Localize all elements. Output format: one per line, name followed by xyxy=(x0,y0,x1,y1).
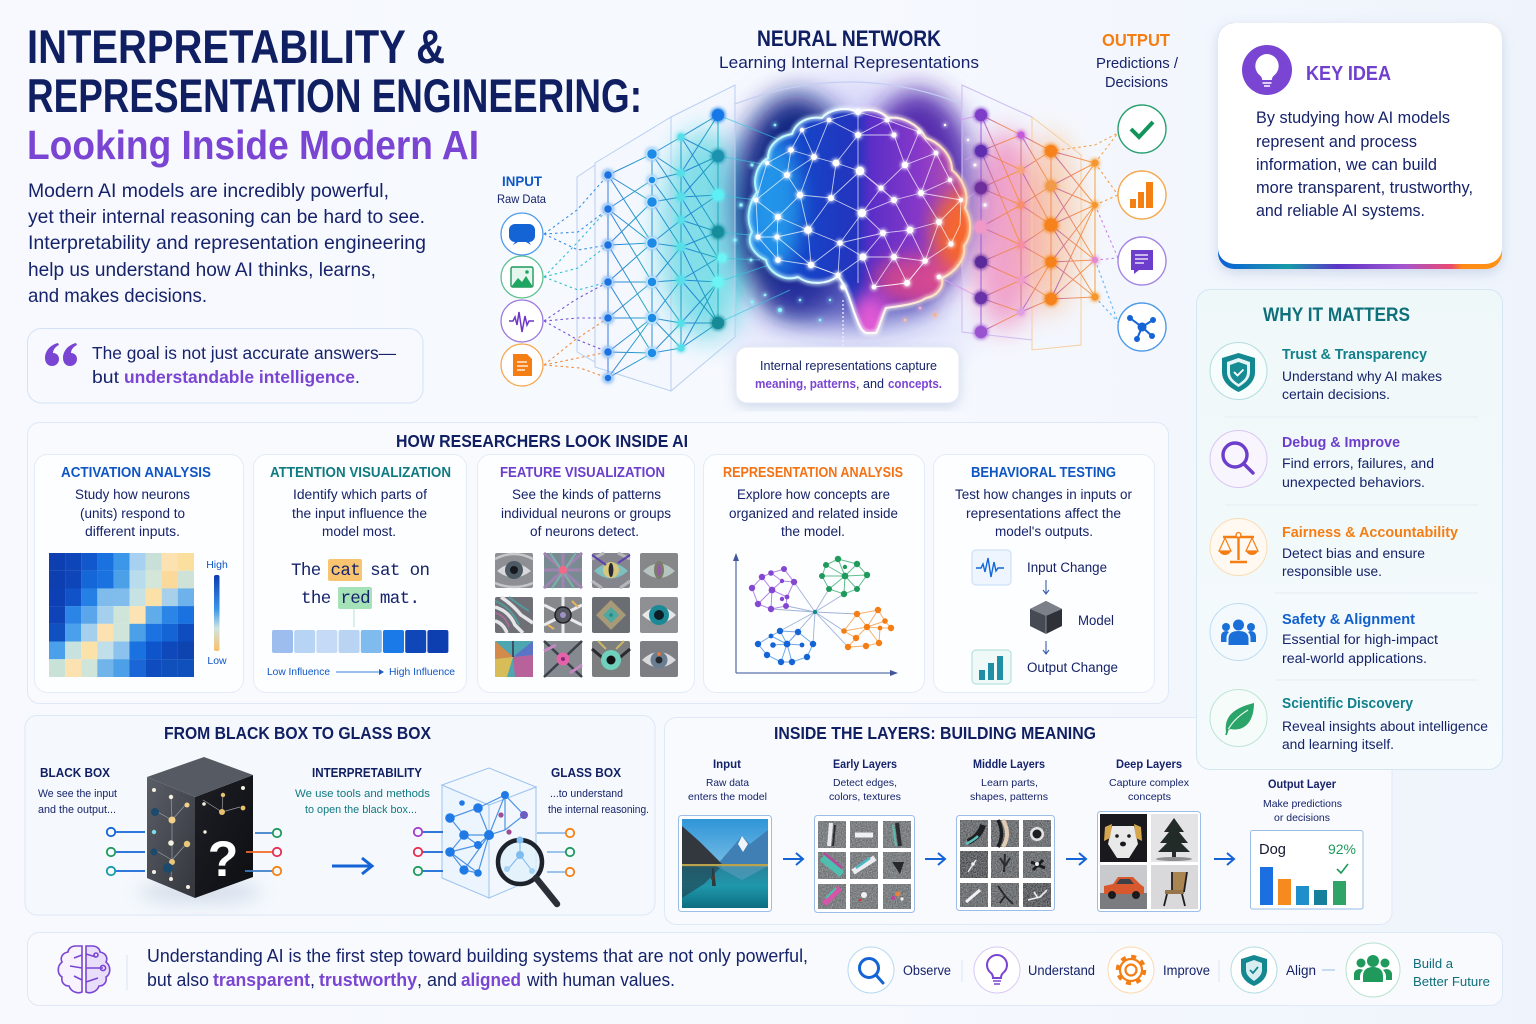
dashed input connections xyxy=(544,175,608,378)
output icons xyxy=(1118,105,1166,351)
callout: internal representations: meaning, patterns xyxy=(755,377,856,391)
influence bars xyxy=(267,630,455,678)
layer: early layers: Detect edges, xyxy=(833,777,897,789)
layer: early layers: Early Layers xyxy=(833,759,897,771)
feature tiles xyxy=(495,553,678,677)
black box cube xyxy=(138,757,262,904)
panel: why it matters: WHY IT MATTERS xyxy=(1263,305,1410,326)
panel: inside the layers: INSIDE THE LAYERS: BUILDING MEANING xyxy=(774,723,1096,743)
card: feature visualization: of neurons detect. xyxy=(530,524,639,539)
layer: deep layers xyxy=(1098,759,1200,912)
icon: output chart xyxy=(972,650,1011,684)
item: debug and improve: Debug & Improve xyxy=(1282,435,1400,451)
card: behavioral testing: representations affect the xyxy=(966,506,1121,521)
interpretability text: to open the black box... xyxy=(305,804,417,816)
takeaway text: transparent xyxy=(213,970,310,990)
item: trust and transparency xyxy=(1210,342,1442,402)
callout: internal representations: concepts. xyxy=(888,377,942,391)
item: safety and alignment: Essential for high-impact xyxy=(1282,632,1438,647)
heatmap legend: High xyxy=(206,559,228,571)
item: safety and alignment xyxy=(1210,604,1438,666)
influence bars: High Influence xyxy=(389,667,455,678)
step: understand xyxy=(974,947,1095,993)
glass box text: GLASS BOX xyxy=(551,766,622,780)
panel: key idea xyxy=(1218,23,1502,269)
interpretability text xyxy=(295,766,431,816)
glass box text xyxy=(548,766,649,816)
key idea text: By studying how AI models xyxy=(1256,109,1450,127)
callout: internal representations xyxy=(736,300,959,403)
icon: quote mark xyxy=(45,343,77,366)
item: scientific discovery: and learning itself. xyxy=(1282,737,1394,752)
item: trust and transparency: Understand why AI makes xyxy=(1282,369,1442,384)
brain colour washes xyxy=(750,140,970,332)
right network nodes xyxy=(975,109,1098,338)
arrow: black to glass xyxy=(332,858,372,874)
image: tree xyxy=(1151,814,1198,862)
influence bars: Low Influence xyxy=(267,667,330,678)
black box text: BLACK BOX xyxy=(40,766,111,780)
output label: Predictions / xyxy=(1096,56,1179,72)
item: debug and improve xyxy=(1210,430,1434,490)
icon: brain circuit xyxy=(58,946,110,993)
item: trust and transparency: Trust & Transparency xyxy=(1282,347,1427,363)
test flow diagram: Input Change xyxy=(1027,560,1107,575)
layer: input: Raw data xyxy=(706,777,749,789)
black box arrows xyxy=(107,828,281,875)
title: Looking Inside Modern AI xyxy=(27,122,479,168)
item: safety and alignment: real-world applications. xyxy=(1282,651,1427,666)
output label: OUTPUT xyxy=(1102,30,1170,50)
card: behavioral testing: Test how changes in inputs or xyxy=(955,487,1132,502)
step: align xyxy=(1231,947,1316,993)
black box text: We see the input xyxy=(38,788,117,800)
card: feature visualization: individual neurons or groups xyxy=(501,506,671,521)
item: fairness and accountability: responsible use. xyxy=(1282,564,1382,579)
glass box arrows xyxy=(414,828,574,876)
card: behavioral testing: BEHAVIORAL TESTING xyxy=(971,465,1116,481)
step: build a better future: Build a xyxy=(1413,956,1454,971)
step: build a better future: Better Future xyxy=(1413,974,1490,989)
step: align: Align xyxy=(1286,963,1316,978)
glow background xyxy=(659,80,1078,357)
icon: report xyxy=(1118,237,1166,285)
feature grid: shapes xyxy=(956,816,1054,910)
layer: deep layers: Deep Layers xyxy=(1116,759,1182,771)
card: representation analysis: the model. xyxy=(781,524,845,539)
image: dog xyxy=(1100,814,1147,862)
icon: bars xyxy=(1118,171,1166,219)
neural network heading xyxy=(719,26,979,72)
step: build a better future xyxy=(1346,943,1490,997)
highlighted sentence: The cat sat on xyxy=(291,561,430,581)
intro paragraph: yet their internal reasoning can be hard to see. xyxy=(28,206,425,228)
panel: from black box to glass box: FROM BLACK BOX TO GLASS BOX xyxy=(164,723,431,743)
highlighted sentence: the red mat. xyxy=(301,589,420,609)
card: representation analysis: Explore how concepts are xyxy=(737,487,890,502)
right network connections xyxy=(945,115,1095,332)
card: activation analysis: Study how neurons xyxy=(75,487,190,502)
item: debug and improve: unexpected behaviors. xyxy=(1282,475,1425,490)
key idea text xyxy=(1256,109,1473,220)
icon: waveform xyxy=(501,300,543,342)
callout: internal representations: Internal representations capture xyxy=(760,359,937,373)
icon: network xyxy=(1118,303,1166,351)
card: feature visualization: FEATURE VISUALIZATION xyxy=(500,465,665,481)
neural network heading: Learning Internal Representations xyxy=(719,53,979,72)
card: activation analysis: ACTIVATION ANALYSIS xyxy=(61,465,211,481)
layer: middle layers xyxy=(956,759,1054,910)
layer: input: enters the model xyxy=(688,791,767,803)
icon: chat bubble xyxy=(501,213,543,255)
takeaway text xyxy=(147,946,808,990)
item: fairness and accountability: Fairness & Accountability xyxy=(1282,525,1458,541)
layer: early layers: colors, textures xyxy=(829,791,901,803)
title: INTERPRETABILITY & xyxy=(27,20,445,73)
panel: how researchers look inside AI: HOW RESEARCHERS LOOK INSIDE AI xyxy=(396,431,688,451)
step: improve: Improve xyxy=(1163,963,1210,978)
callout: internal representations: , and xyxy=(856,377,884,391)
concept grid xyxy=(1098,812,1200,912)
layer: output layer: or decisions xyxy=(1274,812,1330,824)
output label xyxy=(1096,30,1179,91)
input label: INPUT xyxy=(502,173,542,189)
takeaway text: aligned xyxy=(461,970,521,990)
card: activation analysis xyxy=(34,454,244,692)
panel: why it matters xyxy=(1196,290,1502,770)
test flow diagram: Model xyxy=(1078,613,1114,628)
item: scientific discovery xyxy=(1210,690,1488,752)
brain mesh xyxy=(756,112,961,287)
item: safety and alignment: Safety & Alignment xyxy=(1282,612,1415,628)
arrow xyxy=(783,853,803,865)
card: representation analysis: REPRESENTATION ANALYSIS xyxy=(723,465,903,481)
panel: bottom takeaway xyxy=(28,932,1502,1006)
step: observe xyxy=(848,947,951,993)
layer: deep layers: concepts xyxy=(1128,791,1171,803)
prediction chart xyxy=(1250,830,1363,909)
card: activation analysis: (units) respond to xyxy=(80,506,185,521)
step: observe: Observe xyxy=(903,963,951,978)
scatter cluster chart xyxy=(733,553,898,676)
icon: image xyxy=(501,256,543,298)
key idea text: represent and process xyxy=(1256,133,1417,151)
glass box text: ...to understand xyxy=(550,788,623,800)
item: scientific discovery: Scientific Discovery xyxy=(1282,696,1413,712)
test flow diagram: Output Change xyxy=(1027,660,1118,675)
icon: model cube xyxy=(1030,601,1062,634)
key idea text: more transparent, trustworthy, xyxy=(1256,179,1473,197)
panel: inside the layers xyxy=(664,718,1392,924)
layer: middle layers: shapes, patterns xyxy=(970,791,1048,803)
callout: goal quote xyxy=(28,328,423,403)
card: attention visualization xyxy=(254,454,466,692)
icon: check xyxy=(1118,105,1166,153)
left network nodes xyxy=(604,109,726,382)
card: attention visualization: ATTENTION VISUALIZATION xyxy=(270,465,451,481)
arrow xyxy=(1066,853,1086,865)
card: attention visualization: Identify which parts of xyxy=(293,487,427,502)
highlighted sentence xyxy=(291,559,430,627)
intro paragraph: Modern AI models are incredibly powerful, xyxy=(28,180,389,202)
card: behavioral testing xyxy=(934,454,1154,692)
layer: output layer: Output Layer xyxy=(1268,779,1336,791)
card: representation analysis xyxy=(704,454,924,692)
card: behavioral testing: model's outputs. xyxy=(995,524,1093,539)
dashed output connections xyxy=(1051,133,1118,322)
layer: deep layers: Capture complex xyxy=(1109,777,1190,789)
takeaway text: Understanding AI is the first step toward building systems that are not only powerful, xyxy=(147,946,808,966)
step: understand: Understand xyxy=(1028,963,1095,978)
key idea text: and reliable AI systems. xyxy=(1256,202,1425,220)
left network connections xyxy=(608,115,790,378)
black box text xyxy=(38,766,117,816)
item: scientific discovery: Reveal insights about intelligence xyxy=(1282,719,1488,734)
glass box text: the internal reasoning. xyxy=(548,804,649,816)
item: debug and improve: Find errors, failures, and xyxy=(1282,456,1434,471)
prediction chart: Dog xyxy=(1259,841,1286,858)
title: REPRESENTATION ENGINEERING: xyxy=(27,69,642,122)
item: trust and transparency: certain decisions. xyxy=(1282,387,1390,402)
callout: goal quote: but xyxy=(92,367,119,387)
image: mountain lake xyxy=(678,816,772,912)
layer: input: Input xyxy=(713,759,741,771)
question mark: ? xyxy=(208,831,238,887)
image: chair xyxy=(1151,865,1198,909)
input label xyxy=(497,173,546,206)
takeaway text: but also xyxy=(147,970,209,990)
arrow xyxy=(1214,853,1234,865)
icon: magnifying glass xyxy=(498,836,557,904)
input icons xyxy=(501,213,543,386)
takeaway text: , xyxy=(310,970,315,990)
callout: goal quote: understandable intelligence xyxy=(124,367,355,387)
takeaway text: trustworthy xyxy=(319,970,417,990)
item: fairness and accountability: Detect bias and ensure xyxy=(1282,546,1425,561)
icon: input wave xyxy=(972,550,1011,585)
card: representation analysis: organized and related inside xyxy=(729,506,898,521)
input label: Raw Data xyxy=(497,192,546,206)
icon: document xyxy=(501,344,543,386)
layer: middle layers: Learn parts, xyxy=(981,777,1038,789)
heatmap legend xyxy=(206,559,228,667)
heatmap legend: Low xyxy=(207,655,227,667)
output label: Decisions xyxy=(1105,75,1168,91)
takeaway text: , and xyxy=(417,970,457,990)
card: feature visualization: See the kinds of patterns xyxy=(512,487,661,502)
icon: light bulb xyxy=(1242,45,1292,95)
key idea text: information, we can build xyxy=(1256,156,1437,174)
title xyxy=(27,20,642,168)
item: fairness and accountability xyxy=(1210,518,1458,579)
layer: middle layers: Middle Layers xyxy=(973,759,1045,771)
card: attention visualization: model most. xyxy=(322,524,396,539)
step: improve xyxy=(1108,947,1210,993)
feature grid: edges xyxy=(814,816,914,912)
layer panels xyxy=(577,85,1081,391)
takeaway text: with human values. xyxy=(526,970,675,990)
callout: goal quote: The goal is not just accurate answers— xyxy=(92,343,396,363)
card: feature visualization xyxy=(478,454,694,692)
panel: from black box to glass box xyxy=(25,716,655,915)
panel: key idea: KEY IDEA xyxy=(1306,63,1391,85)
intro paragraph: and makes decisions. xyxy=(28,285,207,307)
intro paragraph xyxy=(28,180,426,307)
layer: input xyxy=(678,759,772,912)
black box text: and the output... xyxy=(38,804,116,816)
layer: output layer: Make predictions xyxy=(1263,798,1342,810)
layer: early layers xyxy=(814,759,914,912)
heatmap xyxy=(49,553,194,677)
callout: goal quote: . xyxy=(355,367,360,387)
arrow xyxy=(925,853,945,865)
intro paragraph: help us understand how AI thinks, learns, xyxy=(28,259,376,281)
interpretability text: INTERPRETABILITY xyxy=(312,766,423,780)
layer: output layer xyxy=(1250,779,1363,909)
card: activation analysis: different inputs. xyxy=(85,524,180,539)
image: car xyxy=(1100,865,1147,909)
panel: how researchers look inside AI xyxy=(28,422,1168,704)
interpretability text: We use tools and methods xyxy=(295,788,431,800)
glass box xyxy=(442,768,536,898)
card: attention visualization: the input influence the xyxy=(292,506,427,521)
brain nodes xyxy=(754,109,963,290)
neural network heading: NEURAL NETWORK xyxy=(757,26,941,51)
intro paragraph: Interpretability and representation engineering xyxy=(28,232,426,254)
prediction chart: 92% xyxy=(1328,841,1356,857)
neural network illustration with brain xyxy=(544,80,1118,391)
test flow diagram xyxy=(972,550,1118,684)
glowing brain xyxy=(733,109,997,357)
ambient sparks xyxy=(733,124,987,321)
